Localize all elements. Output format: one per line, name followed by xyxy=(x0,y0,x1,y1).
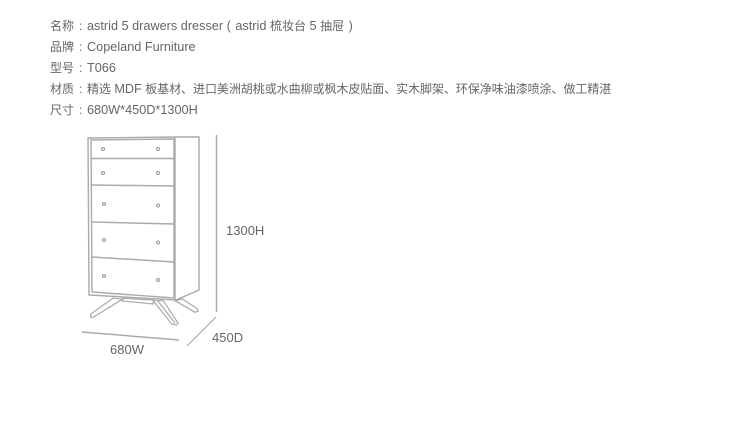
legs xyxy=(91,298,198,325)
spec: model: T066 xyxy=(87,61,116,75)
spec: name: : xyxy=(79,19,82,33)
spec: size: : xyxy=(79,103,82,117)
spec: brand: : xyxy=(79,40,82,54)
height dimension line xyxy=(216,135,218,312)
drawer dividers xyxy=(91,158,174,262)
cabinet body xyxy=(88,137,199,300)
spec: brand: 品牌 xyxy=(50,40,74,54)
spec: model: 型号 xyxy=(50,61,74,75)
spec: material: 精选 MDF 板基材、进口美洲胡桃或水曲柳或枫木皮贴面、实木脚架、环保净味油漆喷涂、做工精湛 xyxy=(87,82,611,96)
label: width: 680W xyxy=(110,342,144,357)
spec: size: 680W*450D*1300H xyxy=(87,103,198,117)
spec: size: 尺寸 xyxy=(50,103,74,117)
label: depth: 450D xyxy=(212,330,243,345)
spec: model xyxy=(50,61,116,75)
spec: name: 名称 xyxy=(50,19,74,33)
spec: name: astrid 5 drawers dresser ( astrid 梳妆台 5 抽屉 ) xyxy=(87,19,353,33)
width dimension line xyxy=(82,332,179,340)
spec: material: : xyxy=(79,82,82,96)
spec: model: : xyxy=(79,61,82,75)
drawer knobs xyxy=(102,148,160,282)
label: height: 1300H xyxy=(226,223,264,238)
spec: material: 材质 xyxy=(50,82,74,96)
spec: brand: Copeland Furniture xyxy=(87,40,196,54)
depth dimension line xyxy=(187,317,216,346)
